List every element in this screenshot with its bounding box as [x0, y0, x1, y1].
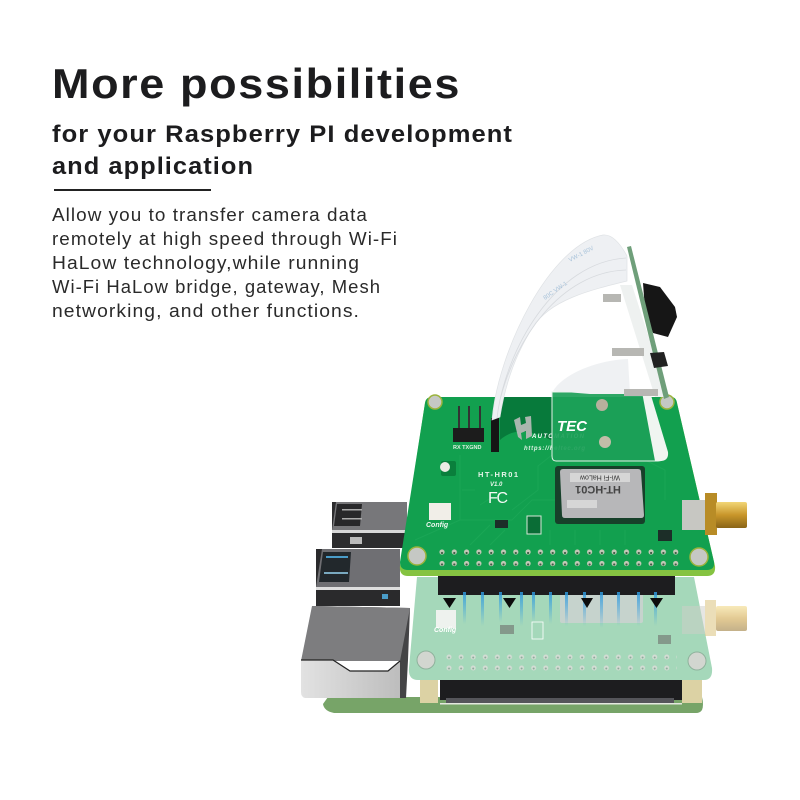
- led component: [440, 461, 456, 476]
- green hat board: [400, 395, 715, 576]
- raspberry pi board: [323, 697, 703, 713]
- fcc mark: FC: [488, 490, 508, 507]
- ghost sma antenna connector: [682, 600, 747, 636]
- camera module: [603, 246, 677, 399]
- ghost hat board: [409, 577, 712, 680]
- blue insertion beams: [463, 592, 657, 628]
- arrows down: [443, 598, 663, 608]
- config button: [426, 503, 451, 529]
- logo: AUTOMATION: [531, 434, 585, 440]
- wifi halow module: [555, 466, 645, 524]
- wifi halow module: Wi-Fi HaLow: [579, 474, 620, 480]
- divider rule: [54, 189, 211, 191]
- usb port lower: [316, 549, 400, 606]
- circuit traces: [415, 455, 665, 545]
- flat ribbon cable: [492, 235, 627, 420]
- ghost small chip: [658, 635, 671, 644]
- ghost module: [560, 590, 643, 623]
- board label: HT-HR01: [478, 470, 518, 479]
- small connector: [527, 516, 541, 534]
- body text: networking, and other functions.: [52, 301, 360, 321]
- top header block: [438, 575, 675, 595]
- subtitle: for your Raspberry PI development: [52, 121, 513, 148]
- subtitle: [52, 121, 513, 180]
- camera lens: [643, 283, 677, 337]
- sma antenna connector: [682, 493, 747, 535]
- acrylic mount: [620, 285, 668, 397]
- brass standoffs: [420, 678, 702, 703]
- ethernet port: [301, 606, 410, 698]
- lower ribbon loop: [553, 359, 630, 394]
- flat ribbon cable: 80C VW-1: [543, 281, 569, 302]
- body text: [52, 205, 398, 321]
- body text: Wi-Fi HaLow bridge, gateway, Mesh: [52, 277, 381, 297]
- acrylic bracket: [552, 392, 668, 461]
- config button: Config: [426, 522, 449, 529]
- dark ribbon shadow: [500, 397, 553, 441]
- pin header: [453, 406, 484, 451]
- body text: HaLow technology,while running: [52, 253, 360, 273]
- body text: Allow you to transfer camera data: [52, 205, 368, 225]
- small chips: [495, 520, 672, 541]
- ghost chip: [500, 625, 514, 634]
- subtitle: and application: [52, 153, 254, 180]
- ghost connector: [532, 622, 543, 639]
- ghost config button: [434, 610, 457, 634]
- usb port upper: [332, 502, 407, 548]
- flat ribbon cable: VW-1 80V: [568, 246, 595, 264]
- standoffs: [603, 294, 658, 396]
- ghost config button: Config: [434, 627, 457, 634]
- camera sensor back: [650, 352, 668, 368]
- body text: remotely at high speed through Wi-Fi: [52, 229, 398, 249]
- ghost screws: [417, 651, 706, 670]
- title: More possibilities: [52, 60, 461, 107]
- logo: [514, 416, 585, 452]
- camera pcb: [627, 246, 669, 399]
- pin header: RX TXGND: [453, 445, 481, 451]
- logo: https://heltec.org: [524, 446, 585, 452]
- version label: V1.0: [490, 482, 503, 488]
- wifi halow module: HT-HC01: [575, 483, 621, 495]
- ghost pin holes: [445, 651, 677, 673]
- corner screws: [408, 395, 708, 566]
- product illustration: [301, 235, 747, 713]
- acrylic bracket: TEC: [557, 418, 588, 435]
- camera connector slot: [491, 418, 499, 452]
- gpio pin holes: [436, 546, 682, 569]
- lower header block: [440, 680, 683, 704]
